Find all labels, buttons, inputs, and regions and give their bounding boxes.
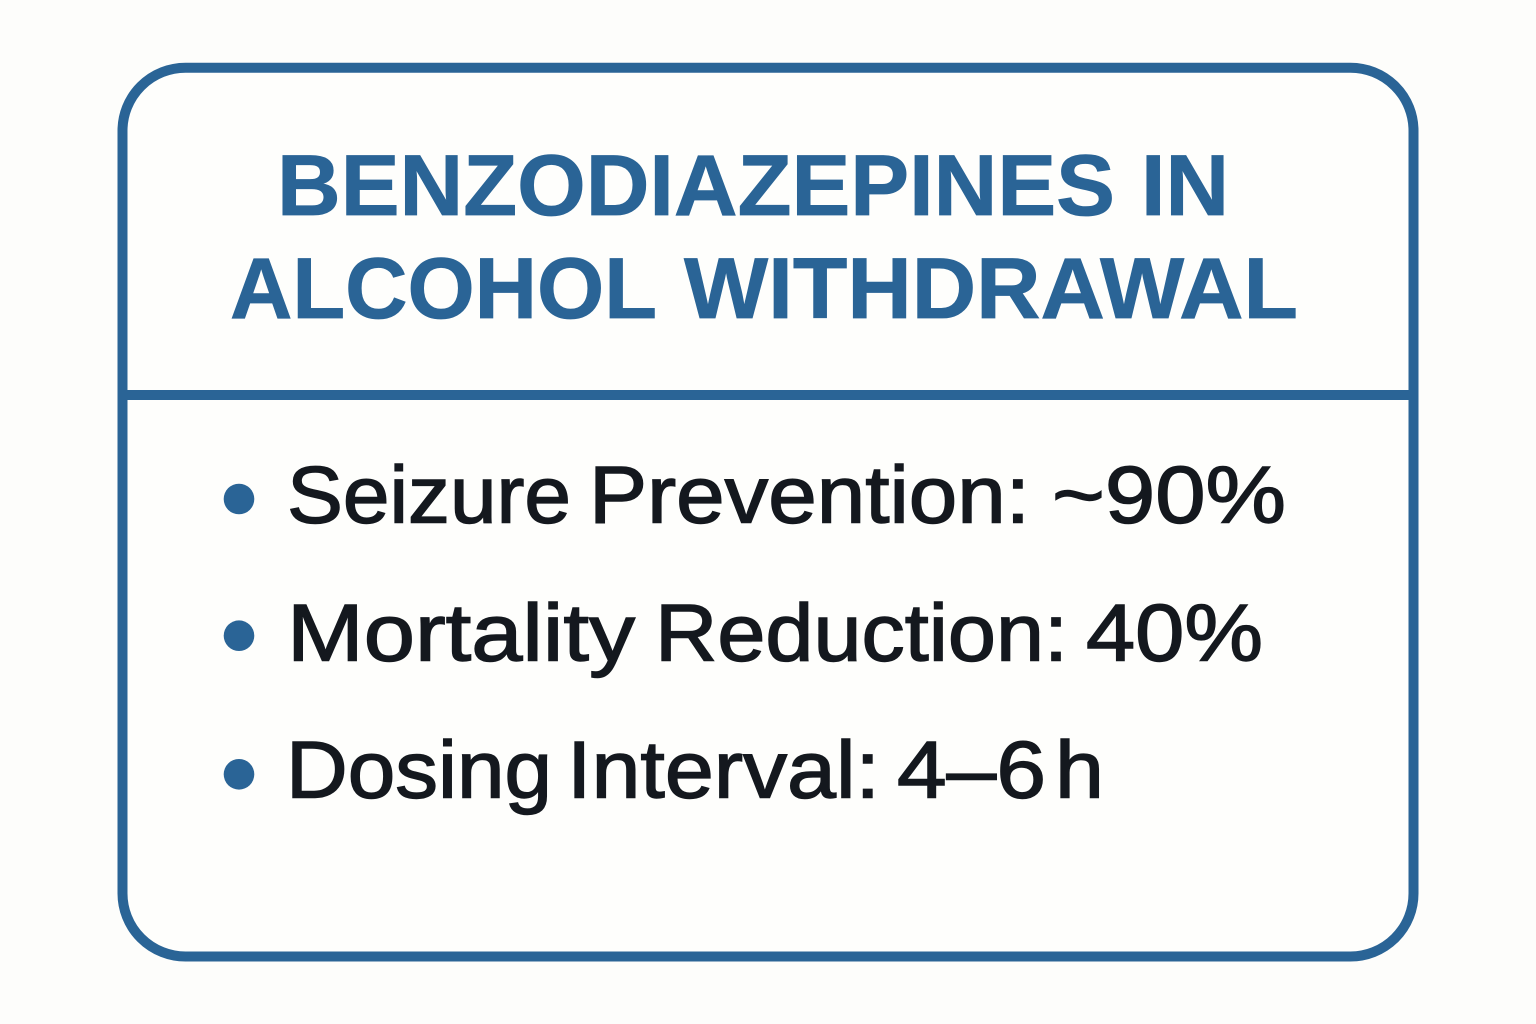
text: mortality reduction xyxy=(287,588,1263,678)
text: dosing interval: h xyxy=(1055,726,1104,816)
title xyxy=(230,138,1298,337)
text: seizure prevention: Prevention: xyxy=(589,450,1030,540)
title: IN xyxy=(1141,138,1229,234)
list: key statistics xyxy=(224,450,1286,816)
text: mortality reduction: Reduction: xyxy=(655,588,1068,678)
divider line xyxy=(124,390,1412,400)
text: dosing interval: Dosing xyxy=(286,726,552,816)
text: seizure prevention: Seizure xyxy=(287,450,571,540)
text: dosing interval xyxy=(286,726,1104,816)
bullet: seizure prevention xyxy=(224,484,254,514)
panel: card outline xyxy=(122,68,1414,956)
text: mortality reduction: Mortality xyxy=(287,588,636,678)
title: WITHDRAWAL xyxy=(684,241,1298,337)
bullet: mortality reduction xyxy=(224,620,254,651)
text: dosing interval: Interval: xyxy=(567,726,880,816)
text: seizure prevention xyxy=(287,450,1286,540)
title: BENZODIAZEPINES xyxy=(277,138,1115,234)
text: seizure prevention: ~90% xyxy=(1052,450,1286,540)
title: ALCOHOL xyxy=(230,241,657,337)
text: mortality reduction: 40% xyxy=(1086,588,1263,678)
text: dosing interval: 4–6 xyxy=(897,726,1046,816)
bullet: dosing interval xyxy=(224,759,254,790)
